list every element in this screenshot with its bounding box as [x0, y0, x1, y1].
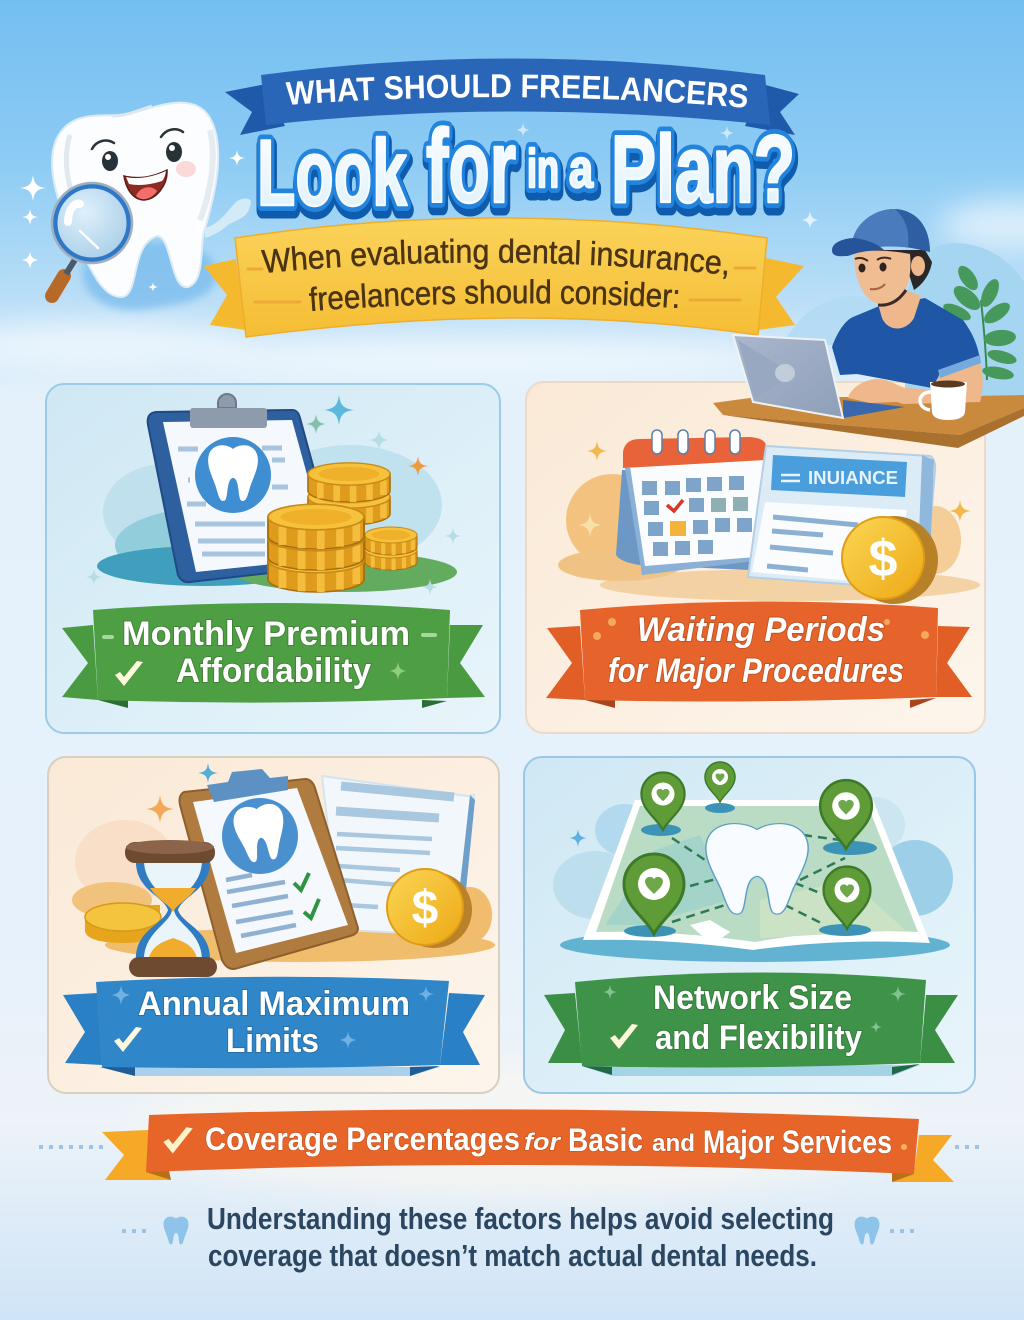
title: look for in a plan: for — [426, 109, 516, 225]
ribbon: annual maximum: Annual Maximum — [138, 985, 410, 1023]
magnifying lens — [55, 186, 129, 260]
yellow banner: subtitle: When evaluating dental insurance, — [260, 238, 728, 279]
ribbon: monthly premium: Affordability — [176, 652, 371, 690]
arms and hands — [848, 363, 983, 404]
title: look for in a plan: Look — [258, 125, 408, 230]
ribbon: monthly premium — [62, 603, 485, 708]
ribbon: waiting periods — [546, 601, 972, 708]
closing text — [207, 1201, 834, 1273]
illustration: watercolor blobs — [72, 763, 495, 962]
icon: paper document — [322, 776, 475, 935]
panel: waiting periods for major procedures — [526, 382, 985, 733]
title: look for in a plan: Plan? — [612, 121, 796, 228]
icon: hourglass — [125, 840, 217, 977]
title: look for in a plan: a — [570, 144, 595, 204]
icon: clipboard with tooth — [148, 394, 340, 582]
sparkles — [20, 123, 819, 292]
ribbon: waiting periods: Waiting Periods — [637, 611, 885, 649]
tooth body — [52, 103, 218, 297]
ribbon: annual maximum: Limits — [226, 1022, 319, 1060]
bottom banner: coverage percentages: Major Services — [703, 1124, 892, 1160]
face — [92, 129, 196, 200]
title: look for in a plan: a — [569, 139, 594, 199]
background hill and plant — [780, 243, 1024, 395]
yellow banner: subtitle — [204, 217, 804, 338]
yellow banner: subtitle: freelancers should consider: — [308, 279, 678, 312]
title: look for in a plan: Plan? — [611, 116, 795, 223]
panel: annual maximum limits — [48, 757, 499, 1093]
icon: dollar coin: $ — [869, 530, 898, 588]
icon: central tooth — [706, 824, 808, 914]
ribbon: network size: and Flexibility — [655, 1019, 862, 1057]
top banner: what should freelancers — [225, 58, 799, 135]
bottom banner: coverage percentages: for — [524, 1129, 562, 1156]
title: look for in a plan: Plan? — [611, 116, 795, 223]
icon: coin stacks — [268, 463, 417, 592]
illustration: watercolor blobs — [553, 797, 953, 962]
icon: left gold coin — [85, 903, 161, 943]
title: look for in a plan: Look — [257, 120, 407, 225]
coffee cup — [920, 380, 967, 420]
panel: network size and flexibility — [524, 757, 975, 1093]
icon: dollar coin — [842, 516, 938, 604]
icon: insurance document — [748, 446, 935, 590]
desk — [713, 395, 1024, 448]
ribbon: waiting periods: for Major Procedures — [608, 652, 904, 690]
neck — [878, 290, 921, 328]
title: look for in a plan — [257, 109, 796, 230]
title: look for in a plan: in — [527, 139, 559, 199]
bottom banner: coverage percentages: Basic — [568, 1122, 643, 1158]
icon: location pins — [624, 762, 877, 937]
magnifying handle — [52, 276, 64, 296]
decorative dots and small teeth — [39, 1147, 985, 1245]
title: look for in a plan: in — [528, 144, 560, 204]
title: look for in a plan: in — [527, 139, 559, 199]
face — [854, 251, 911, 304]
shirt — [832, 298, 980, 388]
panel: monthly premium affordability — [46, 384, 500, 733]
tooth waving arm — [205, 199, 251, 238]
ear — [911, 256, 925, 276]
mascot: tooth with magnifying glass — [20, 103, 819, 310]
ribbon: network size — [544, 972, 958, 1076]
title: look for in a plan: a — [569, 139, 594, 199]
icon: insurance document: INUIANCE — [808, 468, 898, 488]
laptop — [733, 335, 905, 418]
illustration: watercolor blobs — [558, 441, 980, 601]
person — [832, 209, 983, 404]
bottom banner: coverage percentages: and — [652, 1130, 695, 1157]
title: look for in a plan: Look — [257, 120, 407, 225]
title: look for in a plan: for — [426, 109, 516, 225]
icon: dollar coin — [387, 869, 472, 948]
illustration: freelancer at desk — [713, 209, 1024, 448]
hair — [850, 250, 932, 290]
bottom banner: coverage percentages — [102, 1109, 954, 1182]
icon: folded map — [583, 800, 930, 950]
ribbon: network size: Network Size — [653, 979, 852, 1017]
ribbon: monthly premium: Monthly Premium — [122, 615, 410, 653]
icon: clipboard with tooth and checks — [180, 769, 358, 969]
ribbon: annual maximum — [63, 977, 485, 1076]
title: look for in a plan: for — [427, 114, 517, 230]
closing text: coverage that doesn’t match actual dental needs. — [208, 1238, 817, 1273]
illustration: watercolor blobs — [86, 395, 461, 595]
icon: calendar — [616, 430, 766, 575]
bottom banner: coverage percentages: Coverage Percentages — [205, 1121, 520, 1157]
top banner: what should freelancers: WHAT SHOULD FREELANCERS — [286, 74, 748, 108]
icon: dollar coin: $ — [412, 882, 439, 935]
cap — [853, 209, 930, 252]
closing text: Understanding these factors helps avoid selecting — [207, 1201, 834, 1236]
